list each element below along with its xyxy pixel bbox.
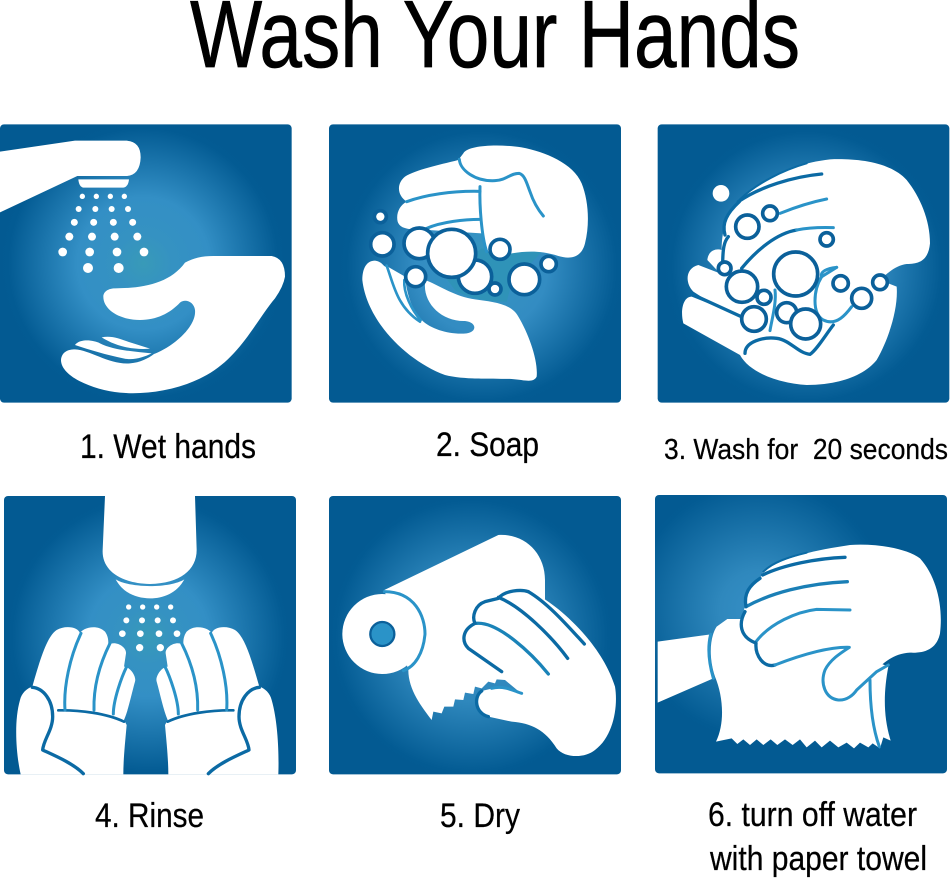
label: step 5: 5. Dry — [440, 797, 520, 835]
label: step 2: 2. Soap — [436, 426, 539, 464]
icon: lower hand — [362, 261, 537, 381]
hand lines lower — [387, 266, 421, 322]
panel: step 2 soap — [329, 124, 621, 403]
icon: faucet — [0, 141, 141, 212]
icon: free soap bubble — [713, 185, 729, 202]
icon: open hand — [61, 256, 285, 393]
icon: water droplets — [58, 194, 148, 273]
panel: step 4 rinse — [4, 496, 296, 774]
panel: step 1 wet hands — [0, 124, 292, 403]
icon: hand — [741, 545, 941, 700]
icon: soap bubbles — [718, 206, 887, 339]
icon: faucet — [103, 496, 197, 584]
icon: right hand — [156, 627, 279, 774]
hand lines upper — [407, 159, 543, 252]
icon: upper hand — [397, 146, 588, 258]
soap lather band — [445, 248, 542, 302]
roll edge line — [384, 592, 425, 671]
hand lines — [464, 590, 584, 717]
label: step 1: 1. Wet hands — [80, 428, 256, 466]
hand lines — [741, 553, 888, 700]
hand lines — [692, 163, 852, 354]
panel: step 6 turn off water — [655, 495, 947, 773]
icon: washing hands — [682, 159, 930, 385]
label: step 6 line 2: with paper towel — [709, 840, 927, 878]
label: step 4: 4. Rinse — [95, 797, 204, 835]
icon: soap bubbles — [371, 211, 556, 295]
icon: paper towel sheet — [384, 535, 545, 720]
icon: roll core — [370, 622, 394, 646]
panel: step 3 wash for 20 seconds — [658, 124, 949, 403]
panel: step 5 dry — [329, 496, 621, 774]
icon: forearm — [658, 634, 713, 703]
label: step 6 line 1: 6. turn off water — [708, 796, 917, 834]
icon: drying hand — [464, 590, 616, 756]
icon: paper roll — [342, 594, 422, 674]
icon: water droplets — [119, 604, 180, 651]
icon: faucet nozzle — [116, 579, 184, 598]
icon: faucet nozzle — [78, 179, 129, 188]
towel edge lines — [709, 634, 879, 747]
icon: left hand — [16, 627, 135, 774]
icon: paper towel — [711, 619, 891, 748]
